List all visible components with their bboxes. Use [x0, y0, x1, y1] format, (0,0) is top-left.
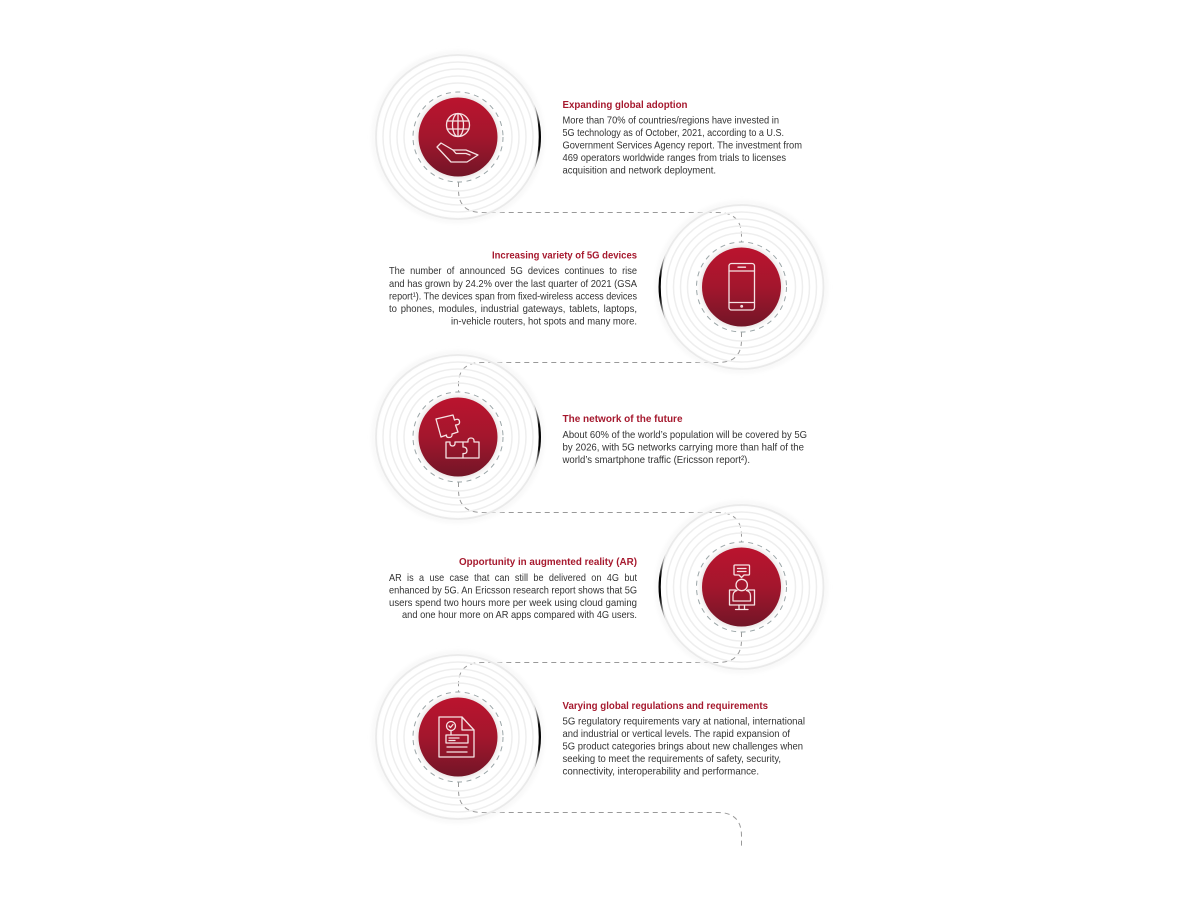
- body text: [389, 266, 637, 328]
- body text: About 60% of the world’s population will be covered by 5G: [562, 430, 807, 441]
- panel: increasing variety of 5G devices: [389, 203, 826, 371]
- body text: seeking to meet the requirements of safety, security,: [562, 754, 781, 765]
- body text: world’s smartphone traffic (Ericsson report²).: [562, 455, 750, 466]
- body text: The number of announced 5G devices continues to rise: [389, 266, 637, 277]
- panel: the network of the future: [374, 353, 807, 521]
- body text: 5G regulatory requirements vary at national, international: [562, 716, 805, 728]
- connector: dashed path: [458, 182, 742, 846]
- heading: The network of the future: [562, 413, 683, 425]
- body text: connectivity, interoperability and performance.: [562, 766, 759, 778]
- body text: [562, 116, 802, 176]
- icon: document with check: [439, 717, 474, 757]
- body text: by 2026, with 5G networks carrying more than half of the: [562, 442, 804, 454]
- icon: user at monitor with speech bubble: [730, 565, 754, 610]
- body text: users spend two hours more per week using cloud gaming: [389, 598, 637, 609]
- target circle 1: [374, 53, 542, 221]
- body text: [562, 716, 805, 778]
- body text: [389, 573, 637, 621]
- body text: and industrial or vertical levels. The rapid expansion of: [562, 729, 790, 740]
- body text: More than 70% of countries/regions have invested in: [562, 116, 779, 126]
- target circle 3: [374, 353, 542, 521]
- body text: in-vehicle routers, hot spots and many more.: [451, 316, 637, 328]
- target circle 4: [658, 503, 826, 671]
- icon: smartphone: [729, 264, 754, 310]
- body text: report¹). The devices span from fixed-wireless access devices: [389, 292, 637, 302]
- body text: [562, 430, 807, 466]
- panel: opportunity in augmented reality: [389, 503, 826, 671]
- body text: and one hour more on AR apps compared with 4G users.: [402, 610, 637, 621]
- body text: and has grown by 24.2% over the last quarter of 2021 (GSA: [389, 279, 637, 290]
- heading: Varying global regulations and requirements: [562, 700, 768, 712]
- body text: Government Services Agency report. The investment from: [562, 140, 802, 152]
- panel: varying global regulations: [374, 653, 805, 821]
- target circle 5: [374, 653, 542, 821]
- icon: puzzle pieces: [436, 415, 479, 458]
- body text: acquisition and network deployment.: [562, 166, 716, 176]
- panel: expanding global adoption: [374, 53, 802, 221]
- heading: Expanding global adoption: [562, 99, 688, 111]
- body text: 5G technology as of October, 2021, according to a U.S.: [562, 128, 784, 139]
- heading: Increasing variety of 5G devices: [492, 250, 637, 262]
- heading: Opportunity in augmented reality (AR): [459, 556, 637, 568]
- icon: globe in hand: [437, 114, 478, 162]
- body text: enhanced by 5G. An Ericsson research report shows that 5G: [389, 586, 637, 596]
- target circle 2: [658, 203, 826, 371]
- body text: to phones, modules, industrial gateways, tablets, laptops,: [389, 304, 637, 315]
- body text: 469 operators worldwide ranges from trials to licenses: [562, 153, 786, 164]
- body text: 5G product categories brings about new challenges when: [562, 742, 803, 752]
- body text: AR is a use case that can still be delivered on 4G but: [389, 573, 637, 584]
